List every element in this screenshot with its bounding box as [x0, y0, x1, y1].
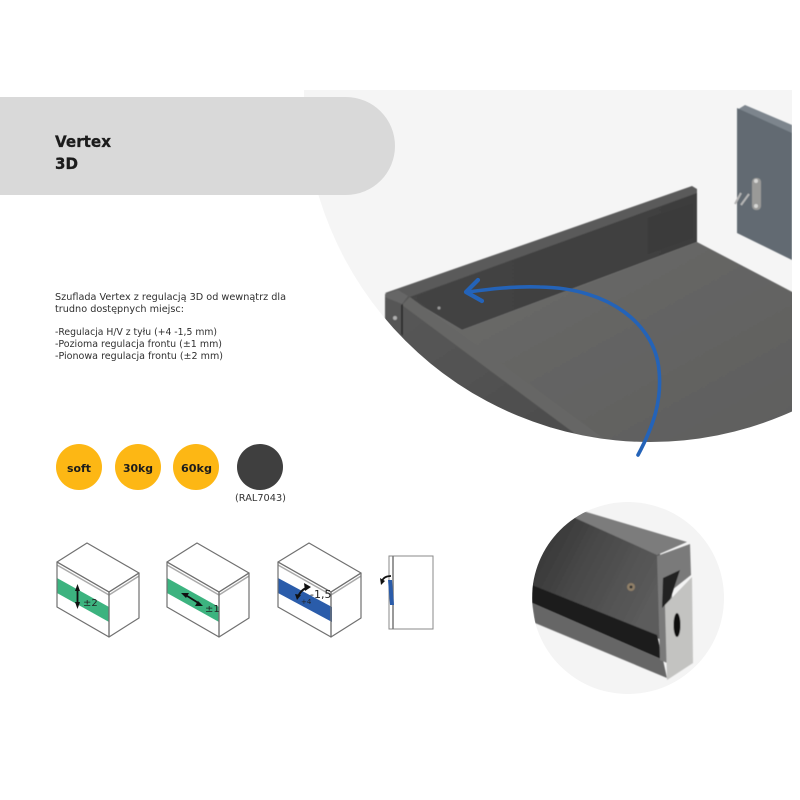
icon: horizontal adjustment box — [167, 543, 249, 637]
colour swatch: RAL7043: (RAL7043) — [235, 493, 286, 504]
title: 3D — [55, 154, 78, 173]
badge: 30kg — [115, 444, 161, 490]
panel: main product image — [304, 90, 792, 442]
panel: title pill — [0, 97, 395, 195]
icon: rear adjustment box — [278, 543, 361, 637]
rear drawer body — [530, 512, 662, 640]
text block: description: -Regulacja H/V z tyłu (+4 -1,5 mm) — [55, 327, 217, 338]
badge: 30kg: 30kg — [123, 462, 153, 475]
text block: description: trudno dostępnych miejsc: — [55, 304, 184, 315]
panel: detail photo — [530, 502, 724, 694]
cabinet door panel with bracket — [735, 105, 792, 260]
icon: rear adjustment box: +4 — [301, 598, 312, 606]
title — [55, 132, 112, 173]
badge: 60kg — [173, 444, 219, 490]
badge: 60kg: 60kg — [181, 462, 212, 475]
light circular backdrop — [304, 90, 792, 317]
icon: rear adjustment box: -1,5 — [310, 588, 331, 601]
text block: description: -Pozioma regulacja frontu (±1 mm) — [55, 339, 222, 350]
icon: vertical adjustment box — [57, 543, 139, 637]
title: Vertex — [55, 132, 112, 151]
badge: soft — [56, 444, 102, 490]
icon: side view of drawer front — [380, 556, 433, 629]
text block: description: -Pionowa regulacja frontu (±2 mm) — [55, 351, 223, 362]
badges: features and colour — [56, 444, 286, 504]
arrow: blue curved adjustment arrow — [466, 280, 660, 455]
text block: description — [55, 292, 286, 362]
icon: vertical adjustment box: ±2 — [83, 598, 98, 609]
badge: soft: soft — [67, 462, 91, 475]
colour swatch: RAL7043 — [235, 444, 286, 504]
text block: description: Szuflada Vertex z regulacją 3D od wewnątrz dla — [55, 292, 286, 303]
drawer render — [385, 186, 800, 460]
icon: horizontal adjustment box: ±1 — [205, 604, 220, 615]
